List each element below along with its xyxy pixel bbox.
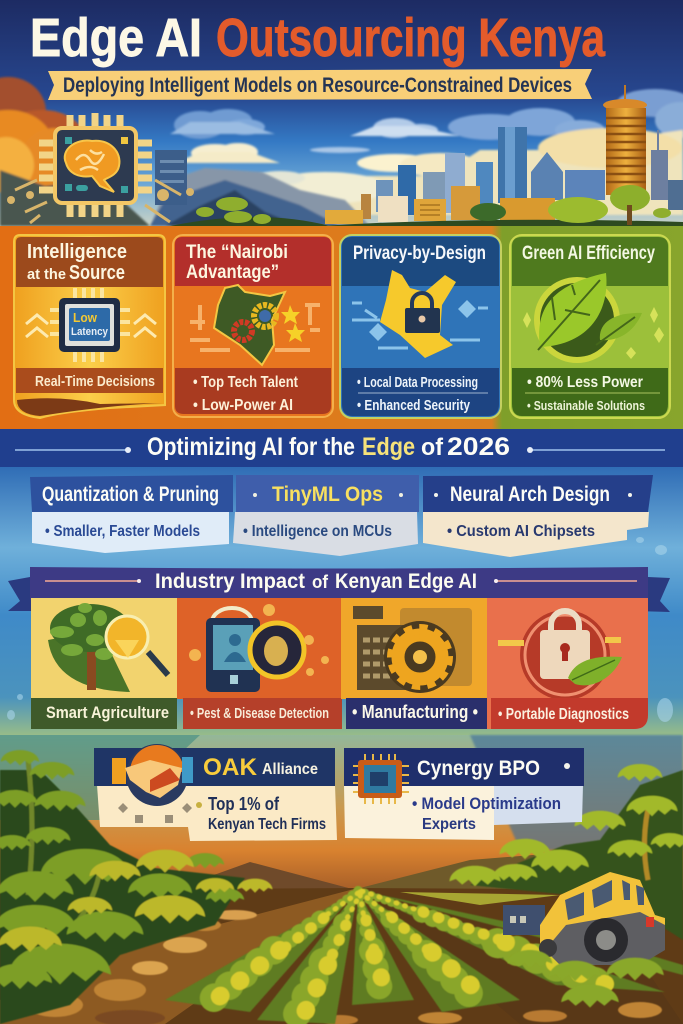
section heading: optimizing ai: 2026	[447, 433, 510, 461]
panel: pest and disease detection	[177, 598, 342, 729]
jungle right	[449, 764, 683, 940]
panel: smart agriculture	[31, 598, 177, 729]
heading	[27, 241, 127, 284]
jungle left	[0, 750, 273, 1024]
panel: quantization and pruning: • Smaller, Faster Models	[45, 523, 200, 540]
icon: low latency chip: Low	[73, 310, 98, 325]
farmland landscape	[0, 735, 683, 1024]
panel: cynergy bpo: Cynergy BPO	[417, 757, 540, 780]
panel: oak alliance	[94, 744, 337, 841]
list	[525, 374, 660, 413]
list: • Enhanced Security	[357, 397, 471, 414]
brain chip icon	[7, 113, 194, 223]
text	[196, 794, 326, 833]
panel: oak alliance: OAK	[203, 754, 258, 781]
panel: neural arch design: • Custom AI Chipsets	[447, 523, 595, 540]
panel: quantization and pruning: Quantization & Pruning	[42, 483, 219, 506]
panel: privacy by design	[340, 235, 501, 418]
title: Edge AI	[30, 8, 202, 68]
icon: gear and factory	[353, 606, 472, 693]
panel: portable diagnostics	[487, 598, 648, 729]
text: Top 1% of	[208, 794, 280, 814]
heading: The “Nairobi	[186, 242, 288, 263]
icon: phone and face scan	[189, 604, 329, 692]
panel: green ai efficiency	[510, 235, 670, 418]
panel: nairobi advantage	[173, 235, 333, 417]
icon: tree and magnifier	[48, 603, 168, 692]
foreground crops right	[508, 950, 664, 1008]
icon: kenya map with gears	[190, 285, 320, 365]
section heading: optimizing ai: Optimizing AI for the	[147, 433, 355, 461]
heading: Intelligence	[27, 241, 127, 263]
panel: manufacturing: • Manufacturing •	[352, 702, 478, 722]
ribbon heading: industry impact: of	[312, 572, 329, 592]
subtitle banner	[48, 69, 592, 100]
panel: quantization and pruning	[30, 475, 233, 553]
icon: kenya map with lock	[352, 270, 488, 358]
heading line 2: Advantage”	[186, 262, 279, 283]
sky background	[0, 0, 683, 228]
list: • Top Tech Talent	[193, 374, 299, 391]
section heading: optimizing ai: of	[421, 434, 444, 461]
list: • 80% Less Power	[527, 374, 643, 391]
mid section background	[0, 466, 683, 738]
soil clumps	[27, 910, 662, 1024]
ribbon heading: industry impact: Industry Impact	[155, 570, 305, 593]
clouds	[170, 89, 683, 215]
text: Kenyan Tech Firms	[208, 816, 326, 833]
icon: handshake	[112, 744, 193, 823]
ribbon heading: industry impact	[8, 567, 670, 612]
panel: intelligence at the source: Real-Time Decisions	[35, 373, 155, 390]
ribbon heading: industry impact: Kenyan Edge AI	[335, 570, 477, 593]
panel: neural arch design: Neural Arch Design	[450, 483, 610, 506]
floating bubbles	[7, 537, 673, 722]
panel: smart agriculture: Smart Agriculture	[46, 703, 169, 722]
trees	[170, 185, 683, 228]
heading: Privacy-by-Design	[353, 243, 486, 264]
heading: at the	[27, 266, 66, 283]
tractor	[503, 872, 665, 965]
list: • Local Data Processing	[357, 374, 478, 391]
panel: portable diagnostics: • Portable Diagnostics	[498, 706, 629, 723]
panel: tinyml ops: • Intelligence on MCUs	[243, 523, 392, 540]
list	[193, 374, 299, 414]
panel: cynergy bpo	[344, 748, 584, 840]
sunset clouds left	[0, 77, 150, 226]
list: • Sustainable Solutions	[527, 398, 645, 413]
panel: intelligence at the source	[14, 235, 165, 418]
icon: low latency chip: Latency	[71, 326, 109, 338]
text	[412, 794, 561, 833]
feature cards background	[0, 226, 683, 431]
icon: chip	[353, 754, 409, 804]
crop rows	[165, 890, 683, 1024]
list: • Low-Power AI	[193, 397, 293, 414]
text: • Model Optimization	[412, 794, 561, 813]
KICC tower	[603, 85, 647, 195]
hills	[150, 168, 370, 226]
panel: tinyml ops	[233, 475, 419, 556]
text: Experts	[422, 816, 476, 833]
panel: tinyml ops: TinyML Ops	[272, 483, 383, 506]
icon: leaves	[523, 273, 664, 360]
panel: neural arch design	[423, 475, 653, 557]
list	[357, 374, 488, 414]
panel: pest and disease detection: • Pest & Disease Detection	[190, 705, 329, 722]
title	[30, 8, 606, 68]
section heading: optimizing ai: Edge	[362, 433, 415, 461]
skyline	[155, 127, 683, 224]
section heading: optimizing ai	[0, 429, 683, 467]
heading: Source	[69, 262, 125, 284]
icon: lock and leaf	[498, 610, 622, 700]
subtitle banner: Deploying Intelligent Models on Resource-Constrained Devices	[63, 74, 572, 97]
panel: manufacturing	[341, 598, 492, 729]
icon: low latency chip	[26, 288, 156, 362]
panel: oak alliance: Alliance	[262, 761, 318, 778]
